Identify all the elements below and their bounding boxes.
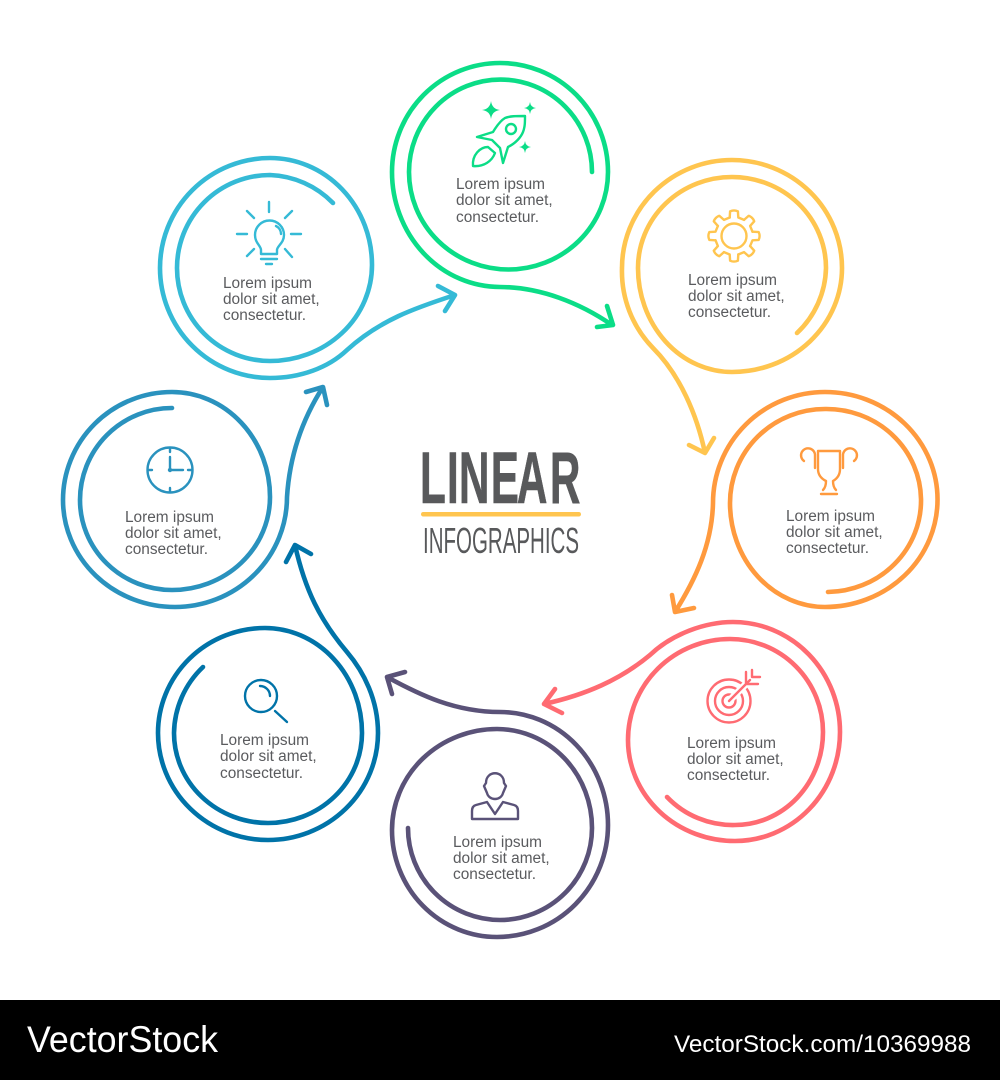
text: navy step: Lorem ipsum — [220, 732, 309, 749]
icon: clock — [148, 448, 192, 492]
text: green step: dolor sit amet, — [456, 192, 553, 209]
text: purple step: consectetur. — [453, 866, 536, 883]
footer logo text: VectorStock — [27, 1019, 218, 1060]
text: orange step — [786, 508, 883, 557]
heading: LINEAR: LINEAR — [420, 437, 580, 519]
icon: light bulb — [237, 202, 301, 264]
text: orange step: consectetur. — [786, 540, 869, 557]
text: yellow step — [688, 272, 785, 321]
panel: step green rocket — [392, 63, 613, 327]
ring with arrow: orange — [672, 392, 938, 612]
ring with arrow: navy — [158, 545, 378, 840]
text: purple step — [453, 834, 550, 883]
panel: step purple person — [387, 672, 608, 937]
text: light blue step — [223, 275, 320, 324]
text: teal step: dolor sit amet, — [125, 525, 222, 542]
panel: step yellow gear — [622, 160, 842, 453]
footer bar — [0, 1000, 1000, 1080]
footer url: VectorStock.com/10369988 — [674, 1031, 971, 1058]
text: pink step — [687, 735, 784, 784]
underline bar — [421, 512, 581, 516]
ring with arrow: light blue — [160, 158, 455, 378]
ring with arrow: teal — [63, 387, 327, 607]
text: yellow step: dolor sit amet, — [688, 288, 785, 305]
panel: step orange trophy — [672, 392, 938, 612]
text: teal step: Lorem ipsum — [125, 509, 214, 526]
text: light blue step: Lorem ipsum — [223, 275, 312, 292]
text: navy step: dolor sit amet, — [220, 748, 317, 765]
text: purple step: dolor sit amet, — [453, 850, 550, 867]
text: pink step: consectetur. — [687, 767, 770, 784]
text: orange step: dolor sit amet, — [786, 524, 883, 541]
text: pink step: Lorem ipsum — [687, 735, 776, 752]
icon: rocket stars — [482, 101, 536, 153]
text: teal step: consectetur. — [125, 541, 208, 558]
text: yellow step: consectetur. — [688, 304, 771, 321]
text: pink step: dolor sit amet, — [687, 751, 784, 768]
panel: step navy magnifier — [158, 545, 378, 840]
panel: step teal clock — [63, 387, 327, 607]
icon: target — [708, 670, 760, 722]
ring with arrow: yellow — [622, 160, 842, 453]
text: purple step: Lorem ipsum — [453, 834, 542, 851]
panel: step pink target — [544, 622, 840, 841]
icon: gear — [708, 210, 760, 262]
text: green step: Lorem ipsum — [456, 176, 545, 193]
panel: step light blue idea — [160, 158, 455, 378]
text: navy step — [220, 732, 317, 782]
ring with arrow: pink — [544, 622, 840, 841]
ring with arrow: green — [392, 63, 613, 327]
text: green step — [456, 176, 553, 226]
subheading: INFOGRAPHICS: INFOGRAPHICS — [423, 520, 579, 561]
text: yellow step: Lorem ipsum — [688, 272, 777, 289]
icon: person — [472, 773, 518, 819]
text: light blue step: dolor sit amet, — [223, 291, 320, 308]
text: green step: consectetur. — [456, 209, 539, 226]
ring with arrow: purple — [387, 672, 608, 937]
icon: rocket — [473, 116, 525, 166]
text: navy step: consectetur. — [220, 765, 303, 782]
text: orange step: Lorem ipsum — [786, 508, 875, 525]
icon: trophy — [801, 448, 857, 494]
title block — [420, 437, 581, 561]
text: light blue step: consectetur. — [223, 307, 306, 324]
icon: magnifier — [245, 680, 287, 722]
text: teal step — [125, 509, 222, 558]
